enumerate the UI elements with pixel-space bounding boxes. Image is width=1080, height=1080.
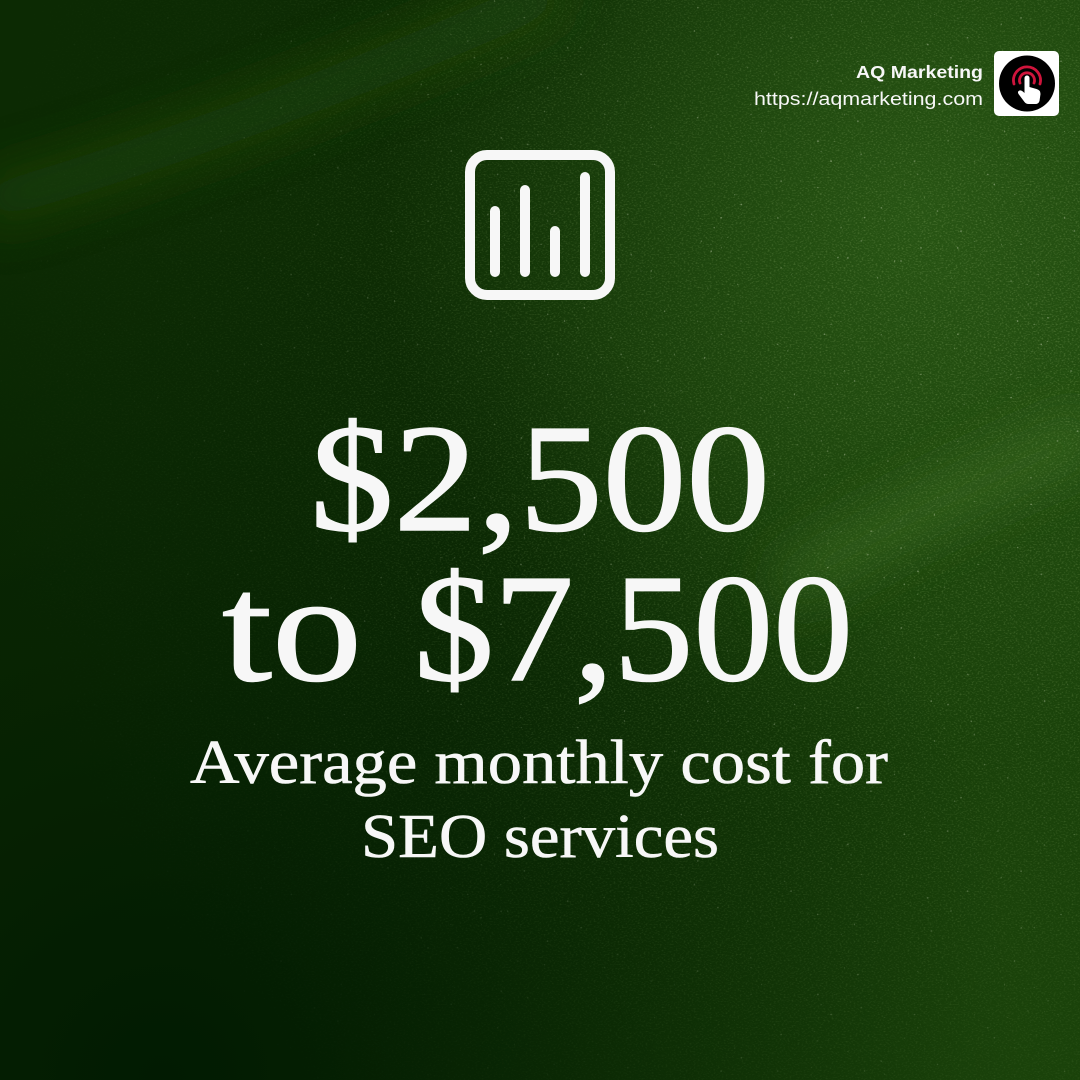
headline line 2 [222, 544, 853, 714]
caption: what the figure describes [190, 729, 888, 871]
icon: brand logo with tapping hand [994, 51, 1059, 116]
caption line 2: SEO services [361, 803, 719, 871]
icon: bar chart in rounded square [470, 155, 610, 295]
caption line 1: Average monthly cost for [190, 729, 888, 797]
headline line 2: to [222, 544, 362, 714]
brand name: AQ Marketing [856, 62, 983, 82]
headline line 1: $2,500 [310, 394, 770, 564]
headline: cost range [222, 394, 853, 714]
brand block: AQ Marketing [754, 51, 1059, 116]
headline line 2: $7,500 [414, 544, 853, 714]
brand URL: https://aqmarketing.com [754, 88, 983, 109]
